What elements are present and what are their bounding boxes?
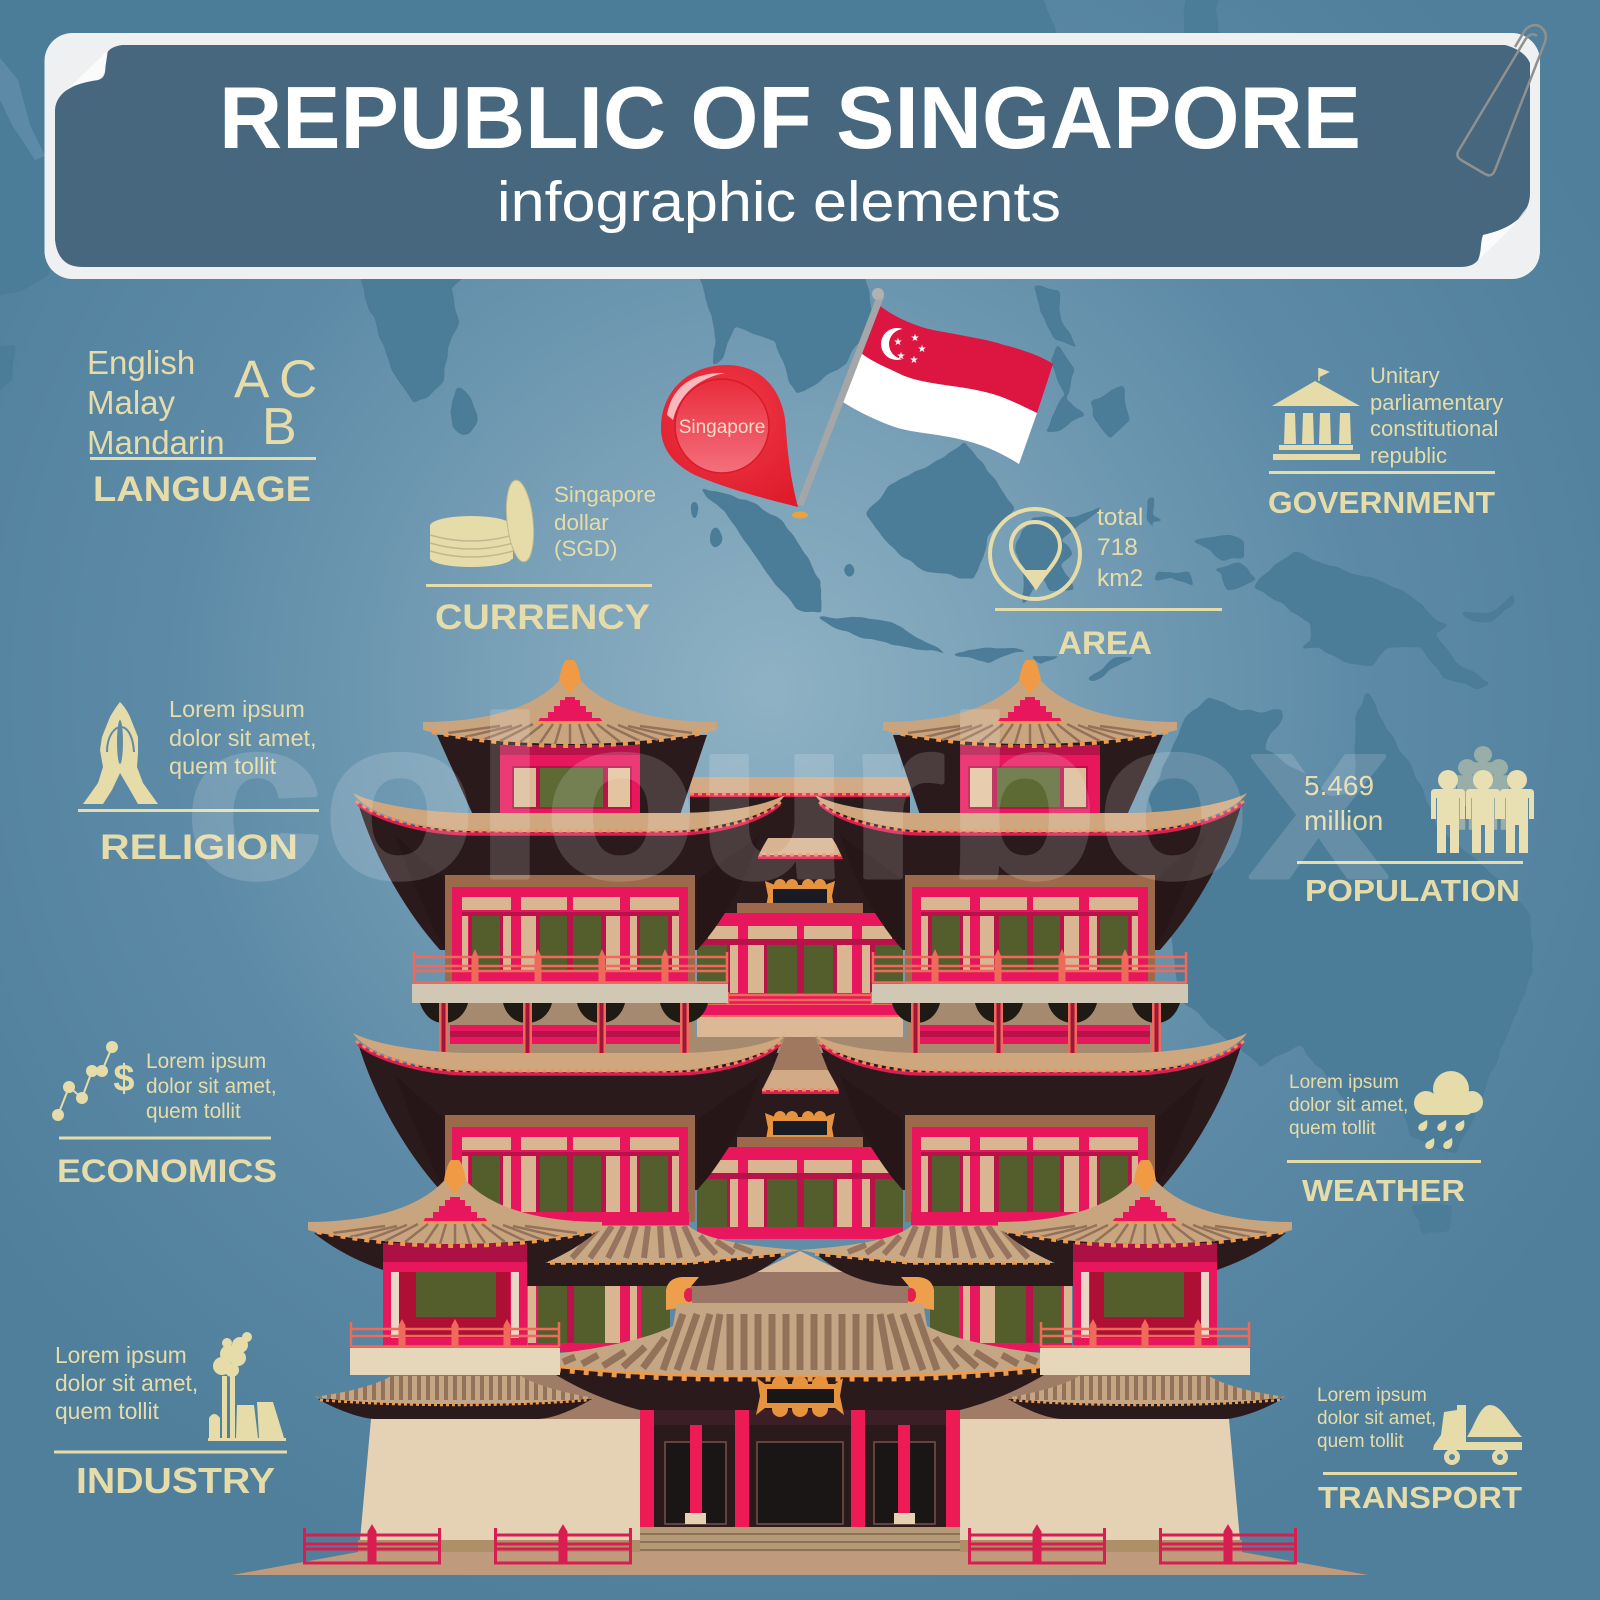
map: sea gap at left edge [0,58,45,160]
panel: weather: WEATHER [1302,1173,1465,1208]
left tower: lower floor under balcony [420,1003,708,1059]
icon: letters [234,350,317,456]
subtitle: infographic elements [497,170,1061,234]
panel: government: republic [1370,443,1447,468]
icon: praying hands [83,702,158,804]
panel: area: AREA [1058,625,1152,661]
panel: religion: Lorem ipsum [169,696,305,722]
panel: industry: Lorem ipsum [55,1342,187,1368]
right tower: second eave and windows [815,1033,1247,1225]
panel: currency: (SGD) [554,536,617,561]
icon: coins [430,479,537,567]
panel: economics: Lorem ipsum [146,1050,266,1073]
icon: rising chart with dollar [52,1041,135,1121]
flag of Singapore: ★ [911,333,920,344]
right tower: first eave, windows and balcony [815,793,1247,1003]
panel: language [87,344,317,509]
panel: currency: Singapore [554,482,656,507]
panel: area: total [1097,504,1143,531]
icon: letters: B [262,398,297,456]
panel: transport: quem tollit [1317,1431,1404,1452]
panel: transport: Lorem ipsum [1317,1385,1427,1406]
panel: economics: ECONOMICS [57,1153,277,1189]
icon: letters: C [279,350,317,409]
panel: weather: dolor sit amet, [1289,1095,1408,1116]
panel: population: POPULATION [1305,873,1520,908]
flag of Singapore: ★ [918,344,927,355]
panel: weather: quem tollit [1289,1118,1376,1139]
icon: government building [1272,368,1360,460]
panel: language: English [87,344,195,381]
panel: population: 5.469 [1304,770,1374,801]
panel: transport: TRANSPORT [1318,1480,1522,1515]
panel: area: km2 [1097,565,1143,592]
panel: economics: dolor sit amet, [146,1075,277,1098]
main entrance [640,1405,960,1552]
panel: religion [78,696,319,867]
flag of Singapore: ★ [897,351,906,362]
wing roofs and windows [527,1226,1073,1352]
center section back [690,777,910,1239]
roof peak behind main roof [697,1251,903,1305]
flag of Singapore: ★ [894,337,903,348]
wall and ground [232,1375,1368,1575]
map pin: Singapore: Singapore [679,417,765,438]
left lower pagoda [300,1160,610,1419]
flag of Singapore: ★ [910,355,919,366]
watermark: colourbox [185,672,1388,926]
icon: paper clip [1457,25,1546,175]
panel: government: parliamentary [1370,390,1503,415]
panel: government: constitutional [1370,416,1498,441]
left upper pagoda [423,660,717,815]
panel: population [1297,746,1534,908]
main plaque [756,1376,844,1417]
panel: economics [52,1041,277,1189]
icon: rain cloud [1414,1071,1483,1149]
panel: economics: quem tollit [146,1100,241,1123]
panel: religion: RELIGION [100,828,298,867]
panel: industry: INDUSTRY [76,1460,275,1501]
panel: area: 718 [1097,534,1138,561]
panel: weather: Lorem ipsum [1289,1072,1399,1093]
panel: language: Mandarin [87,424,225,461]
fences [304,1527,1296,1563]
temple: Buddha Tooth Relic Temple illustration [232,660,1368,1575]
panel: population: million [1304,805,1383,836]
panel: industry [54,1332,287,1501]
panel: currency: CURRENCY [435,598,650,637]
panel: government: Unitary [1370,363,1440,388]
icon: factory with smoke [208,1332,286,1441]
left tower: first eave, windows and balcony [353,793,785,1003]
panel: government: GOVERNMENT [1268,485,1495,520]
icon: letters: A [234,350,270,409]
icon: rising chart with dollar: $ [113,1058,135,1100]
panel: industry: dolor sit amet, [55,1370,198,1396]
panel: religion: dolor sit amet, [169,725,317,751]
panel: transport [1317,1385,1522,1515]
panel: area [990,504,1222,661]
right lower pagoda [990,1160,1300,1419]
map pin: Singapore [661,365,808,518]
panel: weather [1287,1071,1483,1208]
flag of Singapore [800,288,1053,505]
title: REPUBLIC OF SINGAPORE [219,68,1361,167]
left tower: second eave and windows [353,1033,785,1225]
header banner [44,25,1546,279]
panel: industry: quem tollit [55,1398,160,1424]
roof ear ornaments [666,1277,934,1310]
panel: currency [426,479,656,637]
icon: dump truck [1433,1405,1522,1465]
main roof [534,1277,1066,1417]
icon: pin in circle [990,509,1080,599]
map: land masses of Asia and Oceania [0,0,1533,1235]
icon: group of people [1431,746,1534,853]
panel: language: LANGUAGE [93,470,311,509]
panel: currency: dollar [554,510,609,535]
panel: religion: quem tollit [169,753,277,779]
right upper pagoda [883,660,1177,815]
right tower: lower floor under balcony [892,1003,1180,1059]
panel: transport: dolor sit amet, [1317,1408,1436,1429]
panel: language: Malay [87,384,176,421]
panel: government [1268,363,1503,520]
